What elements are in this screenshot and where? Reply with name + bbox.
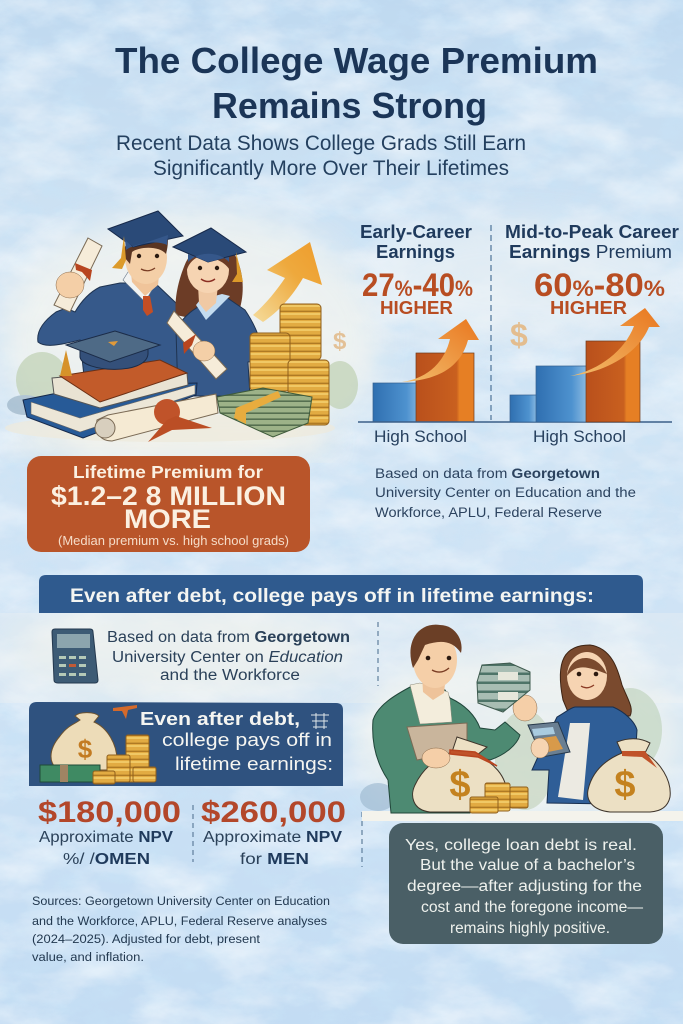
icon: dollar sign: $	[510, 317, 528, 353]
subtitle: Significantly More Over Their Lifetimes	[153, 157, 509, 180]
money bag left: $	[449, 764, 471, 806]
callout: debt note: Yes, college loan debt is real.	[405, 837, 637, 854]
mid-to-peak heading	[505, 222, 679, 262]
data source note: Workforce, APLU, Federal Reserve	[375, 505, 602, 520]
mid-to-peak heading: Mid-to-Peak Career	[505, 222, 679, 242]
money bag left	[413, 737, 507, 812]
stat: men NPV: $260,000	[201, 796, 346, 829]
callout: debt note	[389, 823, 663, 944]
bar chart: mid-to-peak	[510, 308, 660, 422]
callout: debt note: degree—after adjusting for the	[407, 878, 642, 895]
panel: lifetime premium: (Median premium vs. high school grads)	[58, 534, 289, 548]
coin stacks	[470, 783, 528, 813]
man in green sweater	[373, 625, 537, 813]
mid-to-peak stat	[534, 267, 665, 318]
data source text: University Center on Education	[112, 649, 343, 666]
coin stacks	[250, 304, 329, 425]
sources: value, and inflation.	[32, 950, 144, 964]
panel: even after debt: lifetime earnings:	[175, 753, 333, 774]
mortarboard on books	[80, 342, 148, 369]
stat: women NPV: %/ / OMEN	[63, 851, 150, 868]
sources: and the Workforce, APLU, Federal Reserve analyses	[32, 914, 327, 928]
early-career heading: Early-Career	[360, 222, 472, 242]
right diploma	[167, 311, 227, 379]
sources: Sources: Georgetown University Center on Education	[32, 894, 330, 908]
calculator held by woman	[528, 722, 570, 757]
stacked books	[23, 383, 197, 438]
icon: money bag, cash and coins	[40, 705, 156, 784]
stat: men NPV	[201, 796, 346, 868]
stat: men NPV: for MEN	[240, 851, 309, 868]
icon: money bag, cash and coins: $	[78, 734, 93, 764]
data source note: University Center on Education and the	[375, 485, 636, 500]
subtitle: Recent Data Shows College Grads Still Earn	[116, 132, 526, 155]
left diploma	[54, 238, 102, 312]
title: Remains Strong	[212, 85, 487, 126]
heading band	[39, 575, 643, 613]
callout: debt note: But the value of a bachelor’s	[420, 857, 635, 874]
panel: lifetime premium: $1.2–2 8 MILLION	[51, 481, 286, 511]
icon: calculator	[52, 629, 98, 683]
male graduate	[38, 211, 183, 385]
illustration: graduates with books, coins and cash	[5, 211, 358, 442]
early-career stat: HIGHER	[380, 298, 453, 318]
growth arrow	[253, 242, 322, 322]
woman in blue blazer	[532, 645, 637, 804]
early-career stat: 27%-40%	[362, 267, 473, 303]
cash stack held up	[477, 663, 530, 712]
foliage backdrop	[7, 352, 358, 415]
data source text	[107, 629, 350, 684]
stat: women NPV: Approximate NPV	[39, 829, 174, 846]
mid-to-peak stat: 60%-80%	[534, 267, 665, 303]
data source text: Based on data from Georgetown	[107, 629, 350, 646]
data source note	[375, 466, 636, 520]
panel: even after debt: college pays off in	[162, 729, 332, 750]
money bag right: $	[614, 764, 636, 806]
illustration: couple with money bags	[360, 625, 683, 821]
data source note: Based on data from Georgetown	[375, 466, 600, 481]
panel: lifetime premium: MORE	[124, 504, 211, 534]
stat: women NPV	[38, 796, 181, 868]
money bag right	[588, 739, 670, 812]
heading band: Even after debt, college pays off in lifetime earnings:	[70, 586, 594, 607]
cash bundle	[217, 388, 312, 437]
axis label: High School	[374, 428, 467, 446]
callout: debt note: cost and the foregone income—	[421, 899, 644, 916]
stat: women NPV: $180,000	[38, 796, 181, 829]
sources	[32, 894, 330, 964]
panel: lifetime premium	[27, 456, 310, 552]
mid-to-peak stat: HIGHER	[550, 298, 627, 318]
data source text: and the Workforce	[160, 667, 300, 684]
front diploma with ribbon	[97, 394, 218, 441]
icon: small glyph	[311, 713, 329, 729]
panel: even after debt	[29, 702, 343, 786]
early-career stat	[362, 267, 473, 318]
early-career heading: Earnings	[376, 242, 455, 262]
icon: small dollar sign: $	[333, 328, 347, 355]
panel: even after debt: Even after debt,	[140, 708, 300, 729]
female graduate	[173, 228, 263, 396]
sources: (2024–2025). Adjusted for debt, present	[32, 932, 261, 946]
axis label: High School	[533, 428, 626, 446]
panel: lifetime premium: Lifetime Premium for	[73, 462, 263, 482]
subtitle	[116, 132, 526, 180]
callout: debt note: remains highly positive.	[450, 920, 610, 937]
title	[115, 40, 598, 126]
title: The College Wage Premium	[115, 40, 598, 81]
mid-to-peak heading: Earnings Premium	[509, 242, 672, 262]
bar chart: early-career	[358, 319, 672, 422]
divider between career charts	[490, 225, 492, 420]
stat: men NPV: Approximate NPV	[203, 829, 343, 846]
early-career heading	[360, 222, 472, 262]
